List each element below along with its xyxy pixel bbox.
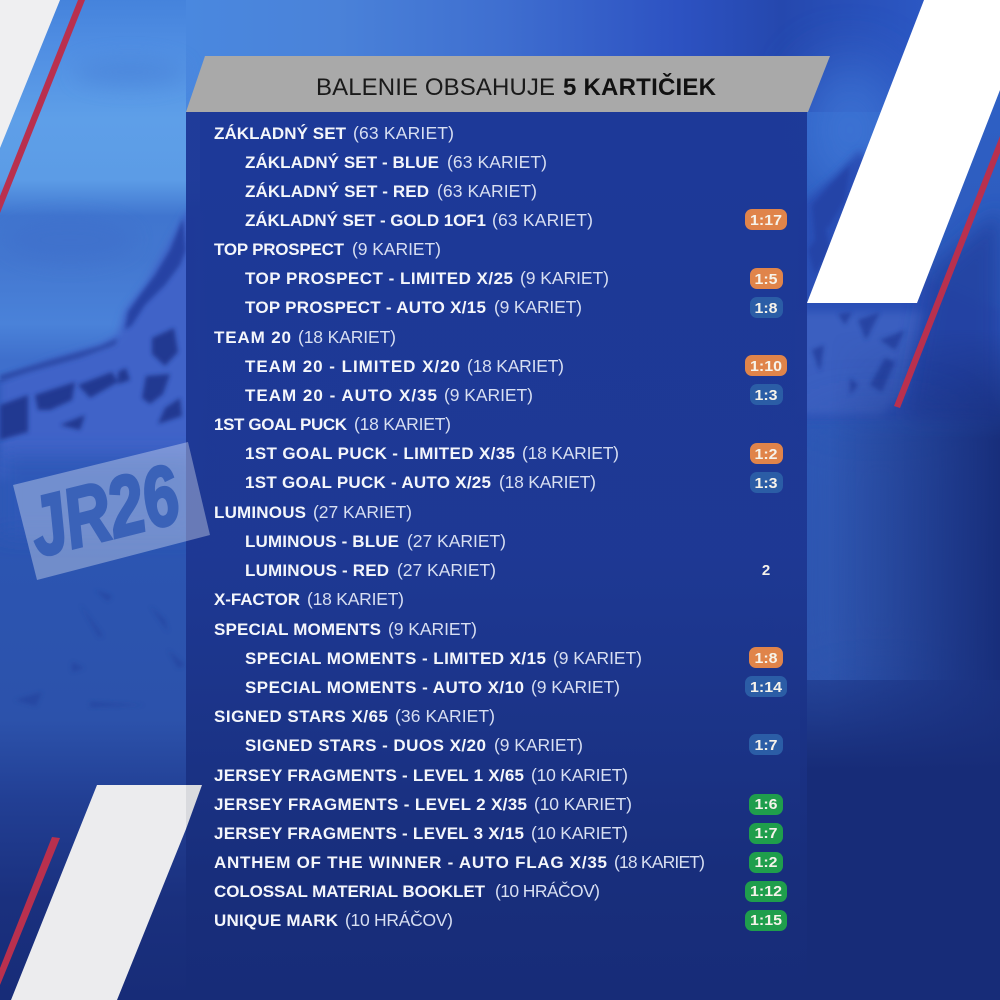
badge 1:5: 1:5 <box>754 271 778 288</box>
row: Team 20: (18 KARIET) <box>298 327 396 347</box>
row: Základný set blue <box>245 152 547 172</box>
header banner: 5 KARTIČIEK <box>563 73 717 101</box>
row: Team 20 <box>214 327 396 347</box>
row: Luminous blue: LUMINOUS - BLUE <box>245 532 399 551</box>
row: Luminous: (27 KARIET) <box>313 502 412 522</box>
row: Colossal Material Booklet: COLOSSAL MATERIAL BOOKLET <box>214 882 486 901</box>
row: Team 20 limited: (18 KARIET) <box>467 356 564 376</box>
row: Základný set blue: (63 KARIET) <box>447 152 547 172</box>
row: Unique Mark: UNIQUE MARK <box>214 911 339 930</box>
content panel <box>186 112 807 1000</box>
badge 1:10 <box>745 355 787 376</box>
badge 1:12 <box>745 881 787 902</box>
row: X-Factor: (18 KARIET) <box>307 589 404 609</box>
row: Základný set gold <box>245 210 593 230</box>
row: Jersey Fragments level 1: JERSEY FRAGMENTS - LEVEL 1 X/65 <box>214 766 524 785</box>
badge 1:3 blue: 1:3 <box>754 387 778 404</box>
row: Luminous <box>214 502 412 522</box>
badge 1:3 blue second <box>750 472 783 493</box>
badge 1:7 blue: 1:7 <box>754 737 778 754</box>
row: X-Factor <box>214 589 404 609</box>
row: Team 20 auto <box>245 385 533 405</box>
badge 1:8 orange: 1:8 <box>754 650 778 667</box>
row: Top Prospect limited <box>245 268 609 288</box>
row: Colossal Material Booklet <box>214 880 600 901</box>
badge 1:14: 1:14 <box>750 679 783 696</box>
row: Top Prospect: TOP PROSPECT <box>214 240 345 259</box>
row: Luminous blue: (27 KARIET) <box>407 531 506 551</box>
row: Special Moments: (9 KARIET) <box>388 619 477 639</box>
row: Základný set red <box>245 181 537 201</box>
row: Team 20 auto: TEAM 20 - AUTO X/35 <box>245 386 437 405</box>
badge 1:10: 1:10 <box>750 358 782 375</box>
badge 1:7 green: 1:7 <box>754 825 778 842</box>
badge 1:3 blue <box>750 384 783 405</box>
row: Signed Stars <box>214 706 495 726</box>
badge 1:3 blue second: 1:3 <box>754 475 778 492</box>
badge 1:7 blue <box>749 734 783 755</box>
row: Signed Stars: SIGNED STARS X/65 <box>214 707 388 726</box>
row: 1st Goal Puck auto <box>245 472 596 492</box>
row: Základný set gold: (63 KARIET) <box>492 210 593 230</box>
row: Special Moments limited: (9 KARIET) <box>553 648 642 668</box>
row: Special Moments auto: SPECIAL MOMENTS - AUTO X/10 <box>245 678 524 697</box>
header banner: BALENIE OBSAHUJE <box>316 74 555 101</box>
row: Colossal Material Booklet: (10 HRÁČOV) <box>495 880 600 901</box>
left top red line <box>0 0 85 213</box>
row: Top Prospect auto: TOP PROSPECT - AUTO X/15 <box>245 298 486 317</box>
badge 1:8 blue: 1:8 <box>754 300 778 317</box>
badge 1:2 orange: 1:2 <box>754 446 778 463</box>
row: Signed Stars duos: (9 KARIET) <box>494 735 583 755</box>
row: Základný set red: (63 KARIET) <box>437 181 537 201</box>
row: Signed Stars duos <box>245 735 583 755</box>
row: Jersey Fragments level 2: JERSEY FRAGMENTS - LEVEL 2 X/35 <box>214 795 527 814</box>
row: Luminous red: LUMINOUS - RED <box>245 561 389 580</box>
row: Anthem of the Winner: (18 KARIET) <box>614 852 705 872</box>
row: Signed Stars: (36 KARIET) <box>395 706 495 726</box>
badge 1:12: 1:12 <box>750 883 782 900</box>
row: Team 20 limited <box>245 356 564 376</box>
card list <box>214 123 705 930</box>
badge 1:17: 1:17 <box>750 212 782 229</box>
row: Anthem of the Winner: ANTHEM OF THE WINNER - AUTO FLAG X/35 <box>214 853 607 872</box>
JR26 sticker: JR26 <box>20 447 189 574</box>
row: Luminous red <box>245 560 496 580</box>
badge 1:14 <box>745 676 787 697</box>
badge 1:8 orange <box>749 647 783 668</box>
badge 1:15: 1:15 <box>750 912 782 929</box>
row: 1st Goal Puck auto: (18 KARIET) <box>499 472 596 492</box>
row: Special Moments: SPECIAL MOMENTS <box>214 620 381 639</box>
badge 1:5 <box>750 268 783 289</box>
row: Základný set: ZÁKLADNÝ SET <box>214 124 347 143</box>
row: 1st Goal Puck <box>214 414 451 434</box>
row: Základný set: (63 KARIET) <box>353 123 454 143</box>
badge 1:2 green: 1:2 <box>754 854 778 871</box>
badge 1:8 blue <box>750 297 783 318</box>
row: Základný set gold: ZÁKLADNÝ SET - GOLD 1OF1 <box>245 211 486 230</box>
right red line <box>894 136 1000 408</box>
row: 1st Goal Puck limited: (18 KARIET) <box>522 443 619 463</box>
row: Základný set <box>214 123 454 143</box>
row: Top Prospect limited: (9 KARIET) <box>520 268 609 288</box>
bottom left red line <box>0 837 60 985</box>
badge 1:17 <box>745 209 787 230</box>
row: Jersey Fragments level 1: (10 KARIET) <box>531 765 628 785</box>
row: Luminous: LUMINOUS <box>214 503 306 522</box>
row: 1st Goal Puck: 1ST GOAL PUCK <box>214 415 348 434</box>
row: X-Factor: X-FACTOR <box>214 590 300 609</box>
header banner <box>186 56 830 112</box>
row: Special Moments auto: (9 KARIET) <box>531 677 620 697</box>
bottom left white stripe <box>11 785 202 1000</box>
row: Top Prospect: (9 KARIET) <box>352 239 441 259</box>
badge 1:6: 1:6 <box>754 796 778 813</box>
badge 1:15 <box>745 910 787 931</box>
row: Jersey Fragments level 3: JERSEY FRAGMENTS - LEVEL 3 X/15 <box>214 824 524 843</box>
row: Základný set blue: ZÁKLADNÝ SET - BLUE <box>245 153 439 172</box>
row: Jersey Fragments level 2: (10 KARIET) <box>534 794 632 814</box>
row: Team 20: TEAM 20 <box>214 328 291 347</box>
row: 1st Goal Puck limited: 1ST GOAL PUCK - LIMITED X/35 <box>245 444 515 463</box>
row: Special Moments limited: SPECIAL MOMENTS - LIMITED X/15 <box>245 649 546 668</box>
row: Unique Mark: (10 HRÁČOV) <box>345 909 453 930</box>
left top white stripe <box>0 0 60 148</box>
badge 1:6 <box>749 794 783 815</box>
row: Luminous red: (27 KARIET) <box>397 560 496 580</box>
row: Top Prospect <box>214 239 441 259</box>
right white stripe <box>807 0 1000 303</box>
row: Team 20 auto: (9 KARIET) <box>444 385 533 405</box>
row: Top Prospect auto: (9 KARIET) <box>494 297 582 317</box>
odds badges <box>745 209 787 931</box>
plain number 2: 2 <box>762 562 770 579</box>
badge 1:2 green <box>749 852 783 873</box>
row: 1st Goal Puck auto: 1ST GOAL PUCK - AUTO X/25 <box>245 473 491 492</box>
row: Signed Stars duos: SIGNED STARS - DUOS X/20 <box>245 736 486 755</box>
row: Unique Mark <box>214 909 453 930</box>
row: Top Prospect limited: TOP PROSPECT - LIMITED X/25 <box>245 269 513 288</box>
row: Jersey Fragments level 3: (10 KARIET) <box>531 823 628 843</box>
row: Základný set red: ZÁKLADNÝ SET - RED <box>245 182 429 201</box>
row: 1st Goal Puck limited <box>245 443 619 463</box>
row: Luminous blue <box>245 531 506 551</box>
row: Special Moments <box>214 619 477 639</box>
row: Top Prospect auto <box>245 297 582 317</box>
row: 1st Goal Puck: (18 KARIET) <box>354 414 451 434</box>
row: Team 20 limited: TEAM 20 - LIMITED X/20 <box>245 357 460 376</box>
badge 1:2 orange <box>750 443 783 464</box>
badge 1:7 green <box>749 823 783 844</box>
